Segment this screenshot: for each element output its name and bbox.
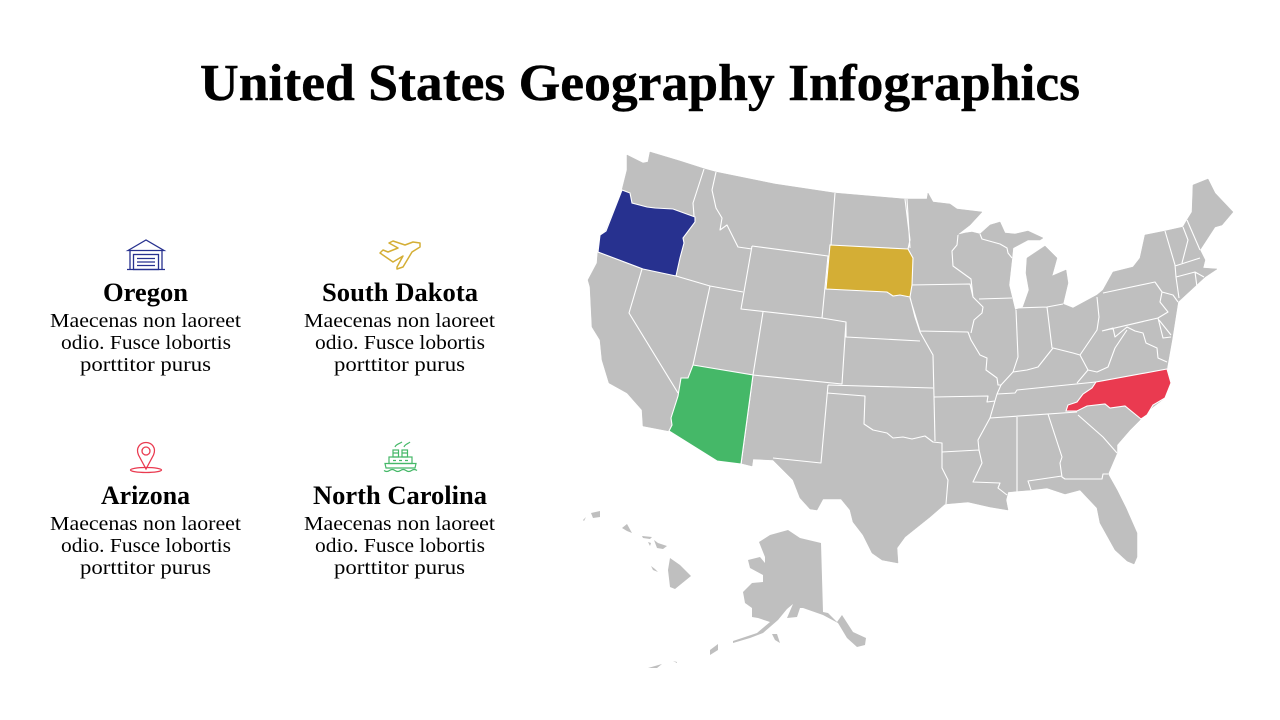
map: South Dakota highlighted — [826, 245, 913, 297]
text block: Oregon description: odio. Fusce lobortis — [61, 332, 231, 354]
map: North Carolina highlighted — [1066, 369, 1171, 419]
text block: Arizona description: Maecenas non laoreet — [50, 513, 241, 535]
heading: North Carolina: North Carolina — [313, 481, 487, 510]
map: Alaska — [733, 530, 866, 647]
panel: North Carolina — [304, 442, 495, 579]
text block: Arizona description: porttitor purus — [80, 557, 211, 579]
text block: North Carolina description — [304, 513, 495, 579]
map: Oregon highlighted — [598, 190, 695, 276]
text block: Arizona description: odio. Fusce lobortis — [61, 535, 231, 557]
icon: ship — [384, 442, 417, 472]
heading: Oregon: Oregon — [103, 278, 189, 307]
text block: South Dakota description: porttitor purus — [334, 354, 465, 376]
text block: Oregon description: porttitor purus — [80, 354, 211, 376]
heading: Arizona: Arizona — [101, 481, 190, 510]
text block: North Carolina description: Maecenas non laoreet — [304, 513, 495, 535]
text block: North Carolina description: odio. Fusce lobortis — [315, 535, 485, 557]
panel: South Dakota — [304, 241, 495, 376]
text block: Oregon description: Maecenas non laoreet — [50, 310, 241, 332]
title: United States Geography Infographics — [200, 55, 1080, 112]
text block: South Dakota description: odio. Fusce lobortis — [315, 332, 485, 354]
icon: map pin — [130, 442, 162, 472]
panel: Oregon — [50, 240, 241, 376]
text block: South Dakota description — [304, 310, 495, 376]
map: United States — [583, 152, 1233, 668]
icon: garage — [127, 240, 165, 270]
text block: South Dakota description: Maecenas non laoreet — [304, 310, 495, 332]
map: Hawaii and Alaskan islands — [583, 511, 780, 668]
map: state borders — [598, 169, 1204, 504]
map: contiguous states silhouette — [588, 152, 1233, 564]
text block: Oregon description — [50, 310, 241, 376]
map: Arizona highlighted — [669, 365, 753, 464]
text block: North Carolina description: porttitor purus — [334, 557, 465, 579]
icon: airplane — [380, 241, 420, 269]
panel: Arizona — [50, 442, 241, 579]
heading: South Dakota: South Dakota — [322, 278, 478, 307]
text block: Arizona description — [50, 513, 241, 579]
